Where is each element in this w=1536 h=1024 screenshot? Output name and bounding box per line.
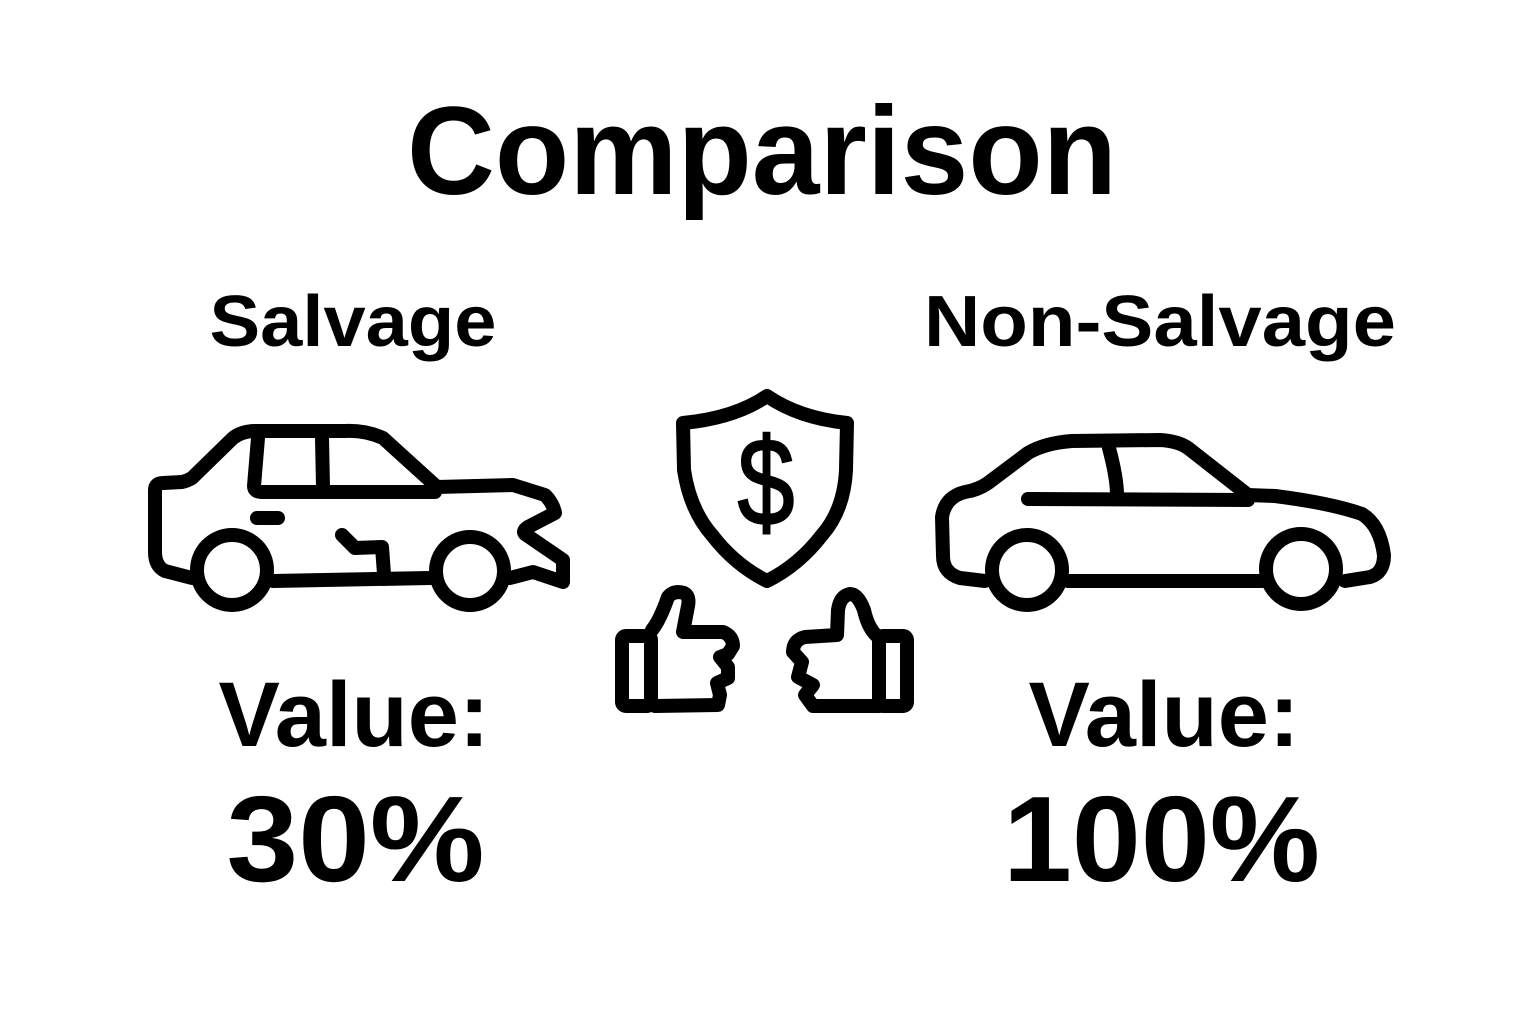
icon: left thumbs up <box>622 592 733 706</box>
heading: non-salvage: Non-Salvage <box>924 282 1396 362</box>
non-salvage value label: Value: <box>1028 664 1300 766</box>
title: Comparison <box>407 82 1117 221</box>
icon: intact non-salvage car <box>942 440 1384 605</box>
heading: salvage: Salvage <box>210 282 496 362</box>
salvage value label: Value: <box>218 664 490 766</box>
icon: damaged salvage car <box>155 431 563 605</box>
icon: right thumbs up <box>793 594 907 706</box>
salvage value figure: 30% <box>226 771 484 907</box>
non-salvage value figure: 100% <box>1003 771 1320 907</box>
icon: shield with dollar sign: $ <box>738 414 794 552</box>
icon: shield with dollar sign <box>683 396 847 581</box>
